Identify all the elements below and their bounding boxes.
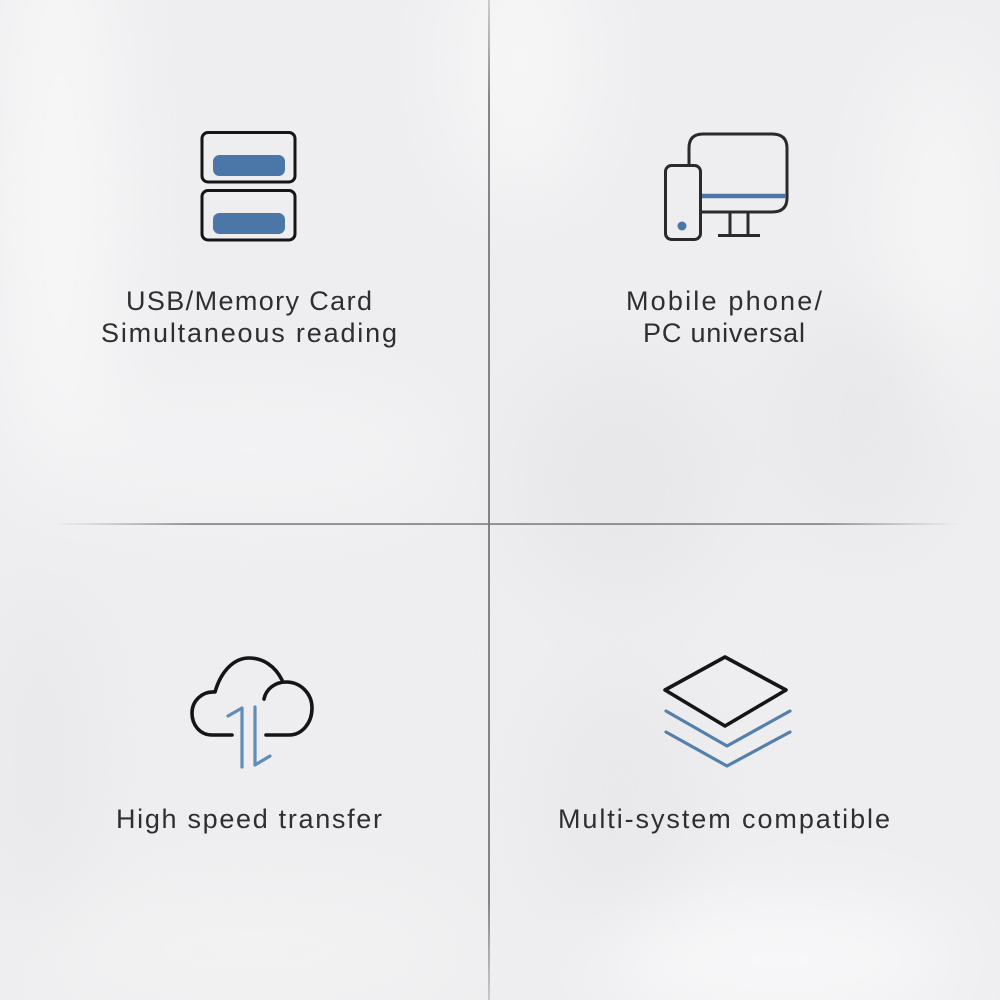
label: Simultaneous reading: Simultaneous reading <box>101 318 397 348</box>
panel: USB/Memory Card <box>101 132 397 348</box>
panel: High speed transfer <box>116 658 382 834</box>
panel: Mobile phone/PC <box>626 134 822 348</box>
horizontal divider <box>55 523 960 525</box>
label: Mobile phone/: Mobile phone/ <box>626 286 822 316</box>
icon: stacked layers <box>665 657 790 766</box>
label: USB/Memory Card: USB/Memory Card <box>126 286 372 316</box>
label: High speed transfer: High speed transfer <box>116 804 382 834</box>
icon: card slots <box>202 132 295 240</box>
label: PC universal: PC universal <box>643 318 805 348</box>
icon: computer and tower <box>666 134 787 240</box>
icon: cloud with transfer arrows <box>192 658 312 767</box>
panel: Multi-system compatible <box>558 657 890 834</box>
vertical divider <box>488 0 490 1000</box>
label: Multi-system compatible: Multi-system compatible <box>558 804 890 834</box>
